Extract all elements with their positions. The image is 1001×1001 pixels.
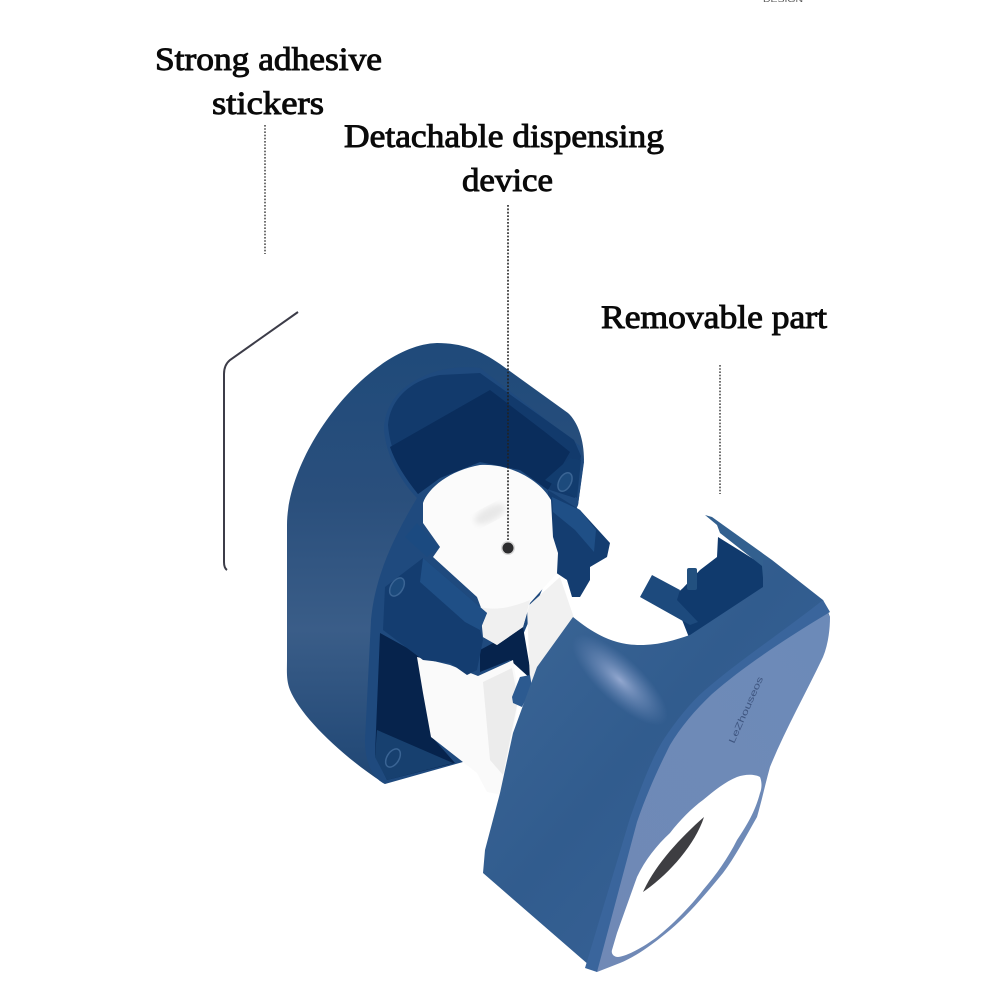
back tab inner <box>673 537 764 640</box>
leader and dot: dispensing device <box>501 205 515 555</box>
tab post <box>687 568 697 590</box>
label: strong adhesive stickers: Strong adhesive <box>155 42 382 78</box>
lower body inner panel <box>483 668 518 775</box>
screw post bottom <box>383 746 403 770</box>
label: strong adhesive stickers: stickers <box>212 86 324 122</box>
tab peg <box>640 575 698 625</box>
lower cavity lit floor <box>375 730 453 780</box>
dispensing device <box>417 465 574 795</box>
face rim edge <box>585 600 830 972</box>
label: removable part: Removable part <box>601 300 827 336</box>
label: detachable dispensing device: Detachable dispensing <box>344 119 664 155</box>
leader: adhesive stickers <box>264 125 266 254</box>
right clip rail <box>548 490 610 597</box>
left clip upper <box>405 523 438 557</box>
sticker bracket outline <box>224 312 298 570</box>
screw post top right <box>555 470 575 494</box>
cavity shadow band <box>390 390 570 494</box>
white lower body <box>417 657 519 795</box>
screw post left <box>387 575 407 599</box>
white hole <box>612 775 762 957</box>
nozzle opening <box>472 500 508 528</box>
label: detachable dispensing device <box>344 119 664 199</box>
lower cavity dark interior <box>375 633 455 780</box>
side highlight <box>560 622 680 738</box>
leader: removable part <box>719 365 721 494</box>
removable part <box>483 515 830 972</box>
label: detachable dispensing device: device <box>462 163 553 199</box>
cavity back wall top <box>388 373 581 498</box>
dark gap behind arms <box>480 627 532 680</box>
housing outer shell <box>287 343 584 784</box>
nozzle cylinder <box>423 465 558 645</box>
left clip rail <box>383 558 487 675</box>
right cavity inner rail <box>545 458 581 498</box>
white arm right <box>527 577 574 682</box>
front face <box>591 605 830 972</box>
left housing <box>287 343 584 784</box>
side shell <box>483 560 830 972</box>
small blue latch <box>512 675 532 707</box>
nozzle shading <box>480 600 530 645</box>
label: strong adhesive stickers <box>155 42 382 122</box>
tab lip <box>705 515 772 590</box>
dark slit <box>643 817 704 892</box>
embossed brand mark: LeZhouseos <box>727 674 765 745</box>
cavity rim <box>365 367 584 784</box>
